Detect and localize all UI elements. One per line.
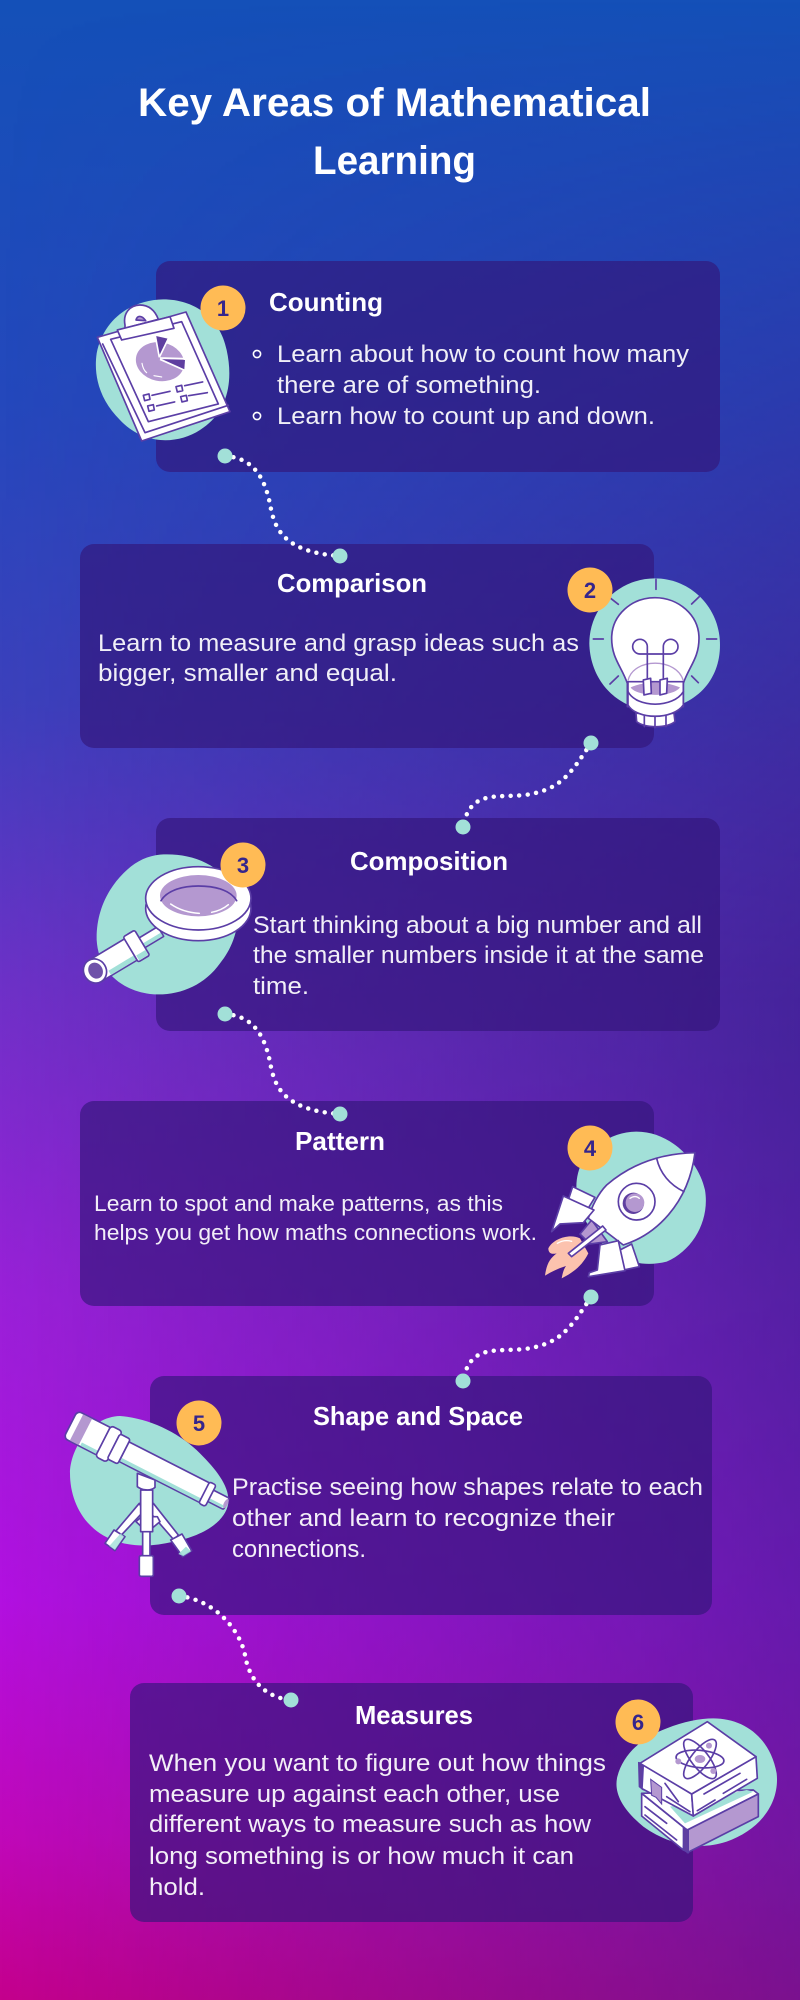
body text (94, 1191, 537, 1245)
bullet list: Learn about how to count how many (277, 341, 690, 368)
number badge 5 (176, 1400, 222, 1446)
body text (149, 1750, 606, 1901)
number badge 5: 5 (193, 1411, 205, 1436)
number badge 1 (200, 286, 246, 330)
heading: Shape and Space: Shape and Space (313, 1401, 523, 1431)
icon: telescope on tripod (63, 1409, 236, 1576)
heading: Pattern: Pattern (295, 1126, 385, 1156)
number badge 3 (220, 842, 266, 888)
heading: Comparison: Comparison (277, 568, 427, 598)
arrow: dotted connector 4 to 5 (456, 1290, 598, 1388)
body text: bigger, smaller and equal. (98, 660, 397, 687)
number badge 4: 4 (584, 1136, 597, 1161)
icon: clipboard with pie chart (96, 299, 230, 441)
body text: long something is or how much it can (149, 1843, 574, 1870)
body text (253, 912, 704, 1000)
bullet list: Learn how to count up and down. (277, 403, 655, 430)
card background (80, 1101, 654, 1306)
bullet list: there are of something. (277, 372, 541, 399)
body text: hold. (149, 1874, 205, 1901)
number badge 6 (616, 1700, 660, 1744)
bullet list (253, 341, 690, 430)
arrow: dotted connector 3 to 4 (218, 1006, 348, 1122)
icon: rocket (545, 1132, 706, 1278)
card background (130, 1683, 693, 1922)
panel: comparison (80, 544, 720, 748)
body text (98, 630, 579, 687)
card background (150, 1376, 712, 1615)
body text: Learn to measure and grasp ideas such as (98, 630, 579, 657)
body text: connections. (232, 1536, 366, 1563)
heading: Counting: Counting (269, 287, 383, 317)
icon: stacked books with atom (616, 1718, 777, 1853)
heading: Measures: Measures (355, 1700, 473, 1730)
icon: light bulb (589, 578, 720, 728)
body text: helps you get how maths connections work. (94, 1220, 537, 1245)
body text: measure up against each other, use (149, 1781, 560, 1808)
body text: Learn to spot and make patterns, as this (94, 1191, 503, 1216)
body text: the smaller numbers inside it at the same (253, 942, 704, 969)
number badge 3: 3 (237, 853, 249, 878)
card background (156, 818, 720, 1031)
number badge 4 (568, 1126, 612, 1170)
arrow: dotted connector 1 to 2 (218, 448, 348, 564)
icon: magnifying glass (78, 854, 251, 994)
body text (232, 1474, 703, 1563)
heading: Composition: Composition (350, 846, 508, 876)
panel: pattern (80, 1101, 706, 1306)
panel: counting (96, 261, 720, 472)
number badge 1: 1 (217, 296, 229, 321)
number badge 2 (568, 568, 612, 612)
body text: Start thinking about a big number and all (253, 912, 702, 939)
body text: other and learn to recognize their (232, 1505, 615, 1532)
card background (80, 544, 654, 748)
number badge 6: 6 (632, 1710, 644, 1735)
panel: composition (78, 818, 720, 1031)
panel: shape and space (63, 1376, 712, 1615)
title: Learning (313, 139, 476, 183)
arrow: dotted connector 5 to 6 (172, 1588, 298, 1708)
body text: When you want to figure out how things (149, 1750, 606, 1777)
body text: Practise seeing how shapes relate to each (232, 1474, 703, 1501)
card background (156, 261, 720, 472)
body text: time. (253, 973, 309, 1000)
title: Key Areas of Mathematical (138, 81, 651, 125)
panel: measures (130, 1683, 777, 1922)
body text: different ways to measure such as how (149, 1811, 591, 1838)
title (138, 81, 651, 183)
number badge 2: 2 (584, 578, 596, 603)
arrow: dotted connector 2 to 3 (456, 736, 598, 834)
